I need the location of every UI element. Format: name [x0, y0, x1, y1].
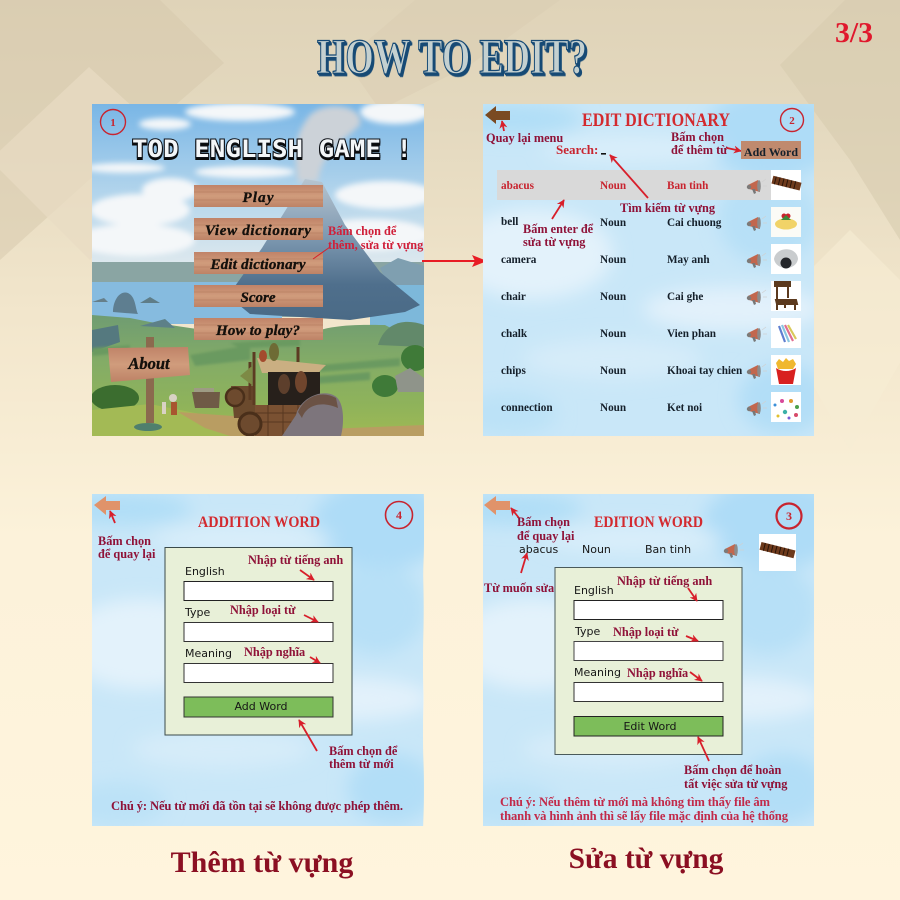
- arrow: step 1 to step 2: [422, 255, 487, 267]
- row: camera: [501, 244, 801, 274]
- edit word form: Meaning: [574, 666, 621, 679]
- game background scene: [75, 100, 435, 436]
- add word form: English: [185, 565, 225, 578]
- note: [500, 795, 789, 823]
- back callout: để quay lại: [98, 547, 156, 561]
- row: connection: Ket noi: [667, 402, 702, 414]
- callout: edit dictionary: thêm, sửa từ vựng: [328, 238, 424, 252]
- row: camera: camera: [501, 254, 537, 266]
- menu button: Edit dictionary: Edit dictionary: [210, 257, 306, 273]
- selected word row: abacus: [519, 543, 558, 556]
- search box: [556, 145, 606, 155]
- add word callout: để thêm từ: [671, 143, 728, 157]
- row: chips: Khoai tay chien: [667, 365, 743, 377]
- about sign: [108, 337, 190, 431]
- title: HOW TO EDIT?: [317, 28, 587, 84]
- panel 3: edition word: [443, 479, 843, 826]
- enter callout: Bấm enter để: [523, 222, 594, 236]
- add word form: Type: [184, 606, 210, 619]
- english callout: Nhập từ tiếng anh: [617, 574, 712, 588]
- row: chair: [501, 281, 801, 311]
- add button callout: Bấm chọn để: [329, 744, 398, 758]
- row: chair: Noun: [600, 291, 627, 303]
- english callout: Nhập từ tiếng anh: [248, 553, 343, 567]
- search box: Search:: [556, 142, 598, 157]
- word callout: Từ muốn sửa: [484, 581, 554, 595]
- note: thanh và hình ảnh thì sẽ lấy file mặc định của hệ thống: [500, 809, 789, 823]
- add word button: Add Word: [744, 145, 798, 159]
- menu button: How to play?: How to play?: [215, 323, 300, 339]
- row: bell: bell: [501, 216, 518, 228]
- cart: [226, 343, 343, 436]
- row: chalk: Vien phan: [667, 328, 717, 340]
- type callout: Nhập loại từ: [613, 625, 679, 639]
- step badge 4: [386, 502, 412, 528]
- panel 4: addition word: [92, 494, 424, 826]
- back callout: [486, 121, 563, 145]
- row: connection: Noun: [600, 402, 627, 414]
- edit word form: [555, 568, 742, 754]
- heading: EDITION WORD: [594, 514, 703, 531]
- edit word form: Type: [574, 625, 600, 638]
- row: chips: Noun: [600, 365, 627, 377]
- add word form: Add Word: [234, 700, 288, 713]
- note: Chú ý: Nếu thêm từ mới mà không tìm thấy file âm: [500, 795, 770, 809]
- panel 2: edit dictionary: [483, 104, 814, 436]
- add word callout: [671, 132, 741, 154]
- row: chalk: Noun: [600, 328, 627, 340]
- row: chair: chair: [501, 291, 526, 303]
- edit button callout: [684, 737, 788, 791]
- game title: TOD ENGLISH GAME !: [132, 135, 412, 163]
- step badge 3: [776, 504, 802, 528]
- selected row: abacus: abacus: [501, 180, 535, 192]
- selected word row: Noun: [582, 543, 611, 556]
- type callout: [613, 625, 698, 641]
- enter callout: [523, 200, 594, 249]
- back callout: [511, 508, 575, 543]
- row: chips: chips: [501, 365, 527, 377]
- back arrow: [484, 496, 510, 515]
- menu button: View dictionary: [194, 218, 323, 240]
- add button callout: thêm từ mới: [329, 757, 394, 771]
- step badge 2: [780, 108, 804, 132]
- step badge 1: [100, 110, 126, 134]
- edit button callout: Bấm chọn để hoàn: [684, 763, 782, 777]
- selected row: abacus: Noun: [600, 180, 627, 192]
- row: camera: Noun: [600, 254, 627, 266]
- sky background: [483, 104, 814, 436]
- back callout: Bấm chọn: [517, 515, 570, 529]
- row: bell: Cai chuong: [667, 217, 722, 229]
- edit button callout: tất việc sửa từ vựng: [684, 777, 788, 791]
- sky background: [443, 479, 843, 826]
- step badge 4: 4: [396, 508, 402, 522]
- back callout: Bấm chọn: [98, 534, 151, 548]
- about sign: About: [127, 354, 170, 373]
- edit word form: English: [574, 584, 614, 597]
- meaning callout: Nhập nghĩa: [244, 645, 305, 659]
- word callout: [484, 553, 554, 595]
- add button callout: [299, 720, 398, 771]
- selected word row: [519, 534, 796, 571]
- back arrow: [485, 106, 510, 124]
- note: Chú ý: Nếu từ mới đã tồn tại sẽ không được phép thêm.: [111, 799, 403, 813]
- menu button: How to play?: [194, 318, 323, 340]
- row: camera: May anh: [667, 254, 710, 266]
- row: bell: Noun: [600, 217, 627, 229]
- heading: ADDITION WORD: [198, 514, 320, 531]
- selected row: abacus: Ban tinh: [667, 180, 709, 192]
- meaning callout: [244, 645, 320, 663]
- row: connection: [501, 392, 801, 422]
- type callout: Nhập loại từ: [230, 603, 296, 617]
- menu button: Score: [194, 285, 323, 307]
- menu button: Edit dictionary: [194, 252, 323, 274]
- step badge 3: 3: [786, 509, 792, 523]
- english callout: [248, 553, 343, 580]
- back callout: để quay lại: [517, 529, 575, 543]
- search callout: [610, 155, 716, 215]
- english callout: [617, 574, 712, 601]
- callout: edit dictionary: Bấm chọn để: [328, 224, 397, 238]
- meaning callout: Nhập nghĩa: [627, 666, 688, 680]
- add word callout: Bấm chọn: [671, 130, 724, 144]
- menu button: Play: Play: [242, 190, 274, 206]
- row: chair: Cai ghe: [667, 291, 703, 303]
- menu button: View dictionary: View dictionary: [205, 223, 311, 239]
- step badge 2: 2: [789, 115, 795, 127]
- enter callout: sửa từ vựng: [523, 235, 586, 249]
- row: chips: [501, 355, 801, 385]
- step badge 1: 1: [110, 117, 116, 129]
- selected row: abacus: [497, 170, 802, 200]
- menu button: Score: Score: [240, 290, 276, 306]
- type callout: [230, 603, 318, 622]
- heading: EDIT DICTIONARY: [582, 110, 730, 131]
- back arrow: [94, 496, 120, 515]
- sky background: [92, 494, 424, 826]
- add word form: Meaning: [185, 647, 232, 660]
- caption: edit word: Sửa từ vựng: [569, 843, 724, 875]
- edit word form: Edit Word: [623, 720, 677, 733]
- callout: edit dictionary: [313, 224, 424, 259]
- add word form: [165, 548, 352, 735]
- search callout: Tìm kiếm từ vựng: [620, 201, 716, 215]
- row: connection: connection: [501, 402, 553, 414]
- row: chalk: [501, 318, 801, 348]
- back callout: [98, 511, 156, 561]
- row: chalk: chalk: [501, 328, 528, 340]
- back callout: Quay lại menu: [486, 131, 563, 145]
- caption: add word: Thêm từ vựng: [171, 846, 353, 879]
- menu button: Play: [194, 185, 323, 207]
- panel 1: game menu: [75, 100, 435, 436]
- page number: 3/3: [835, 18, 873, 49]
- selected word row: Ban tinh: [645, 543, 691, 556]
- row: bell: [501, 207, 801, 237]
